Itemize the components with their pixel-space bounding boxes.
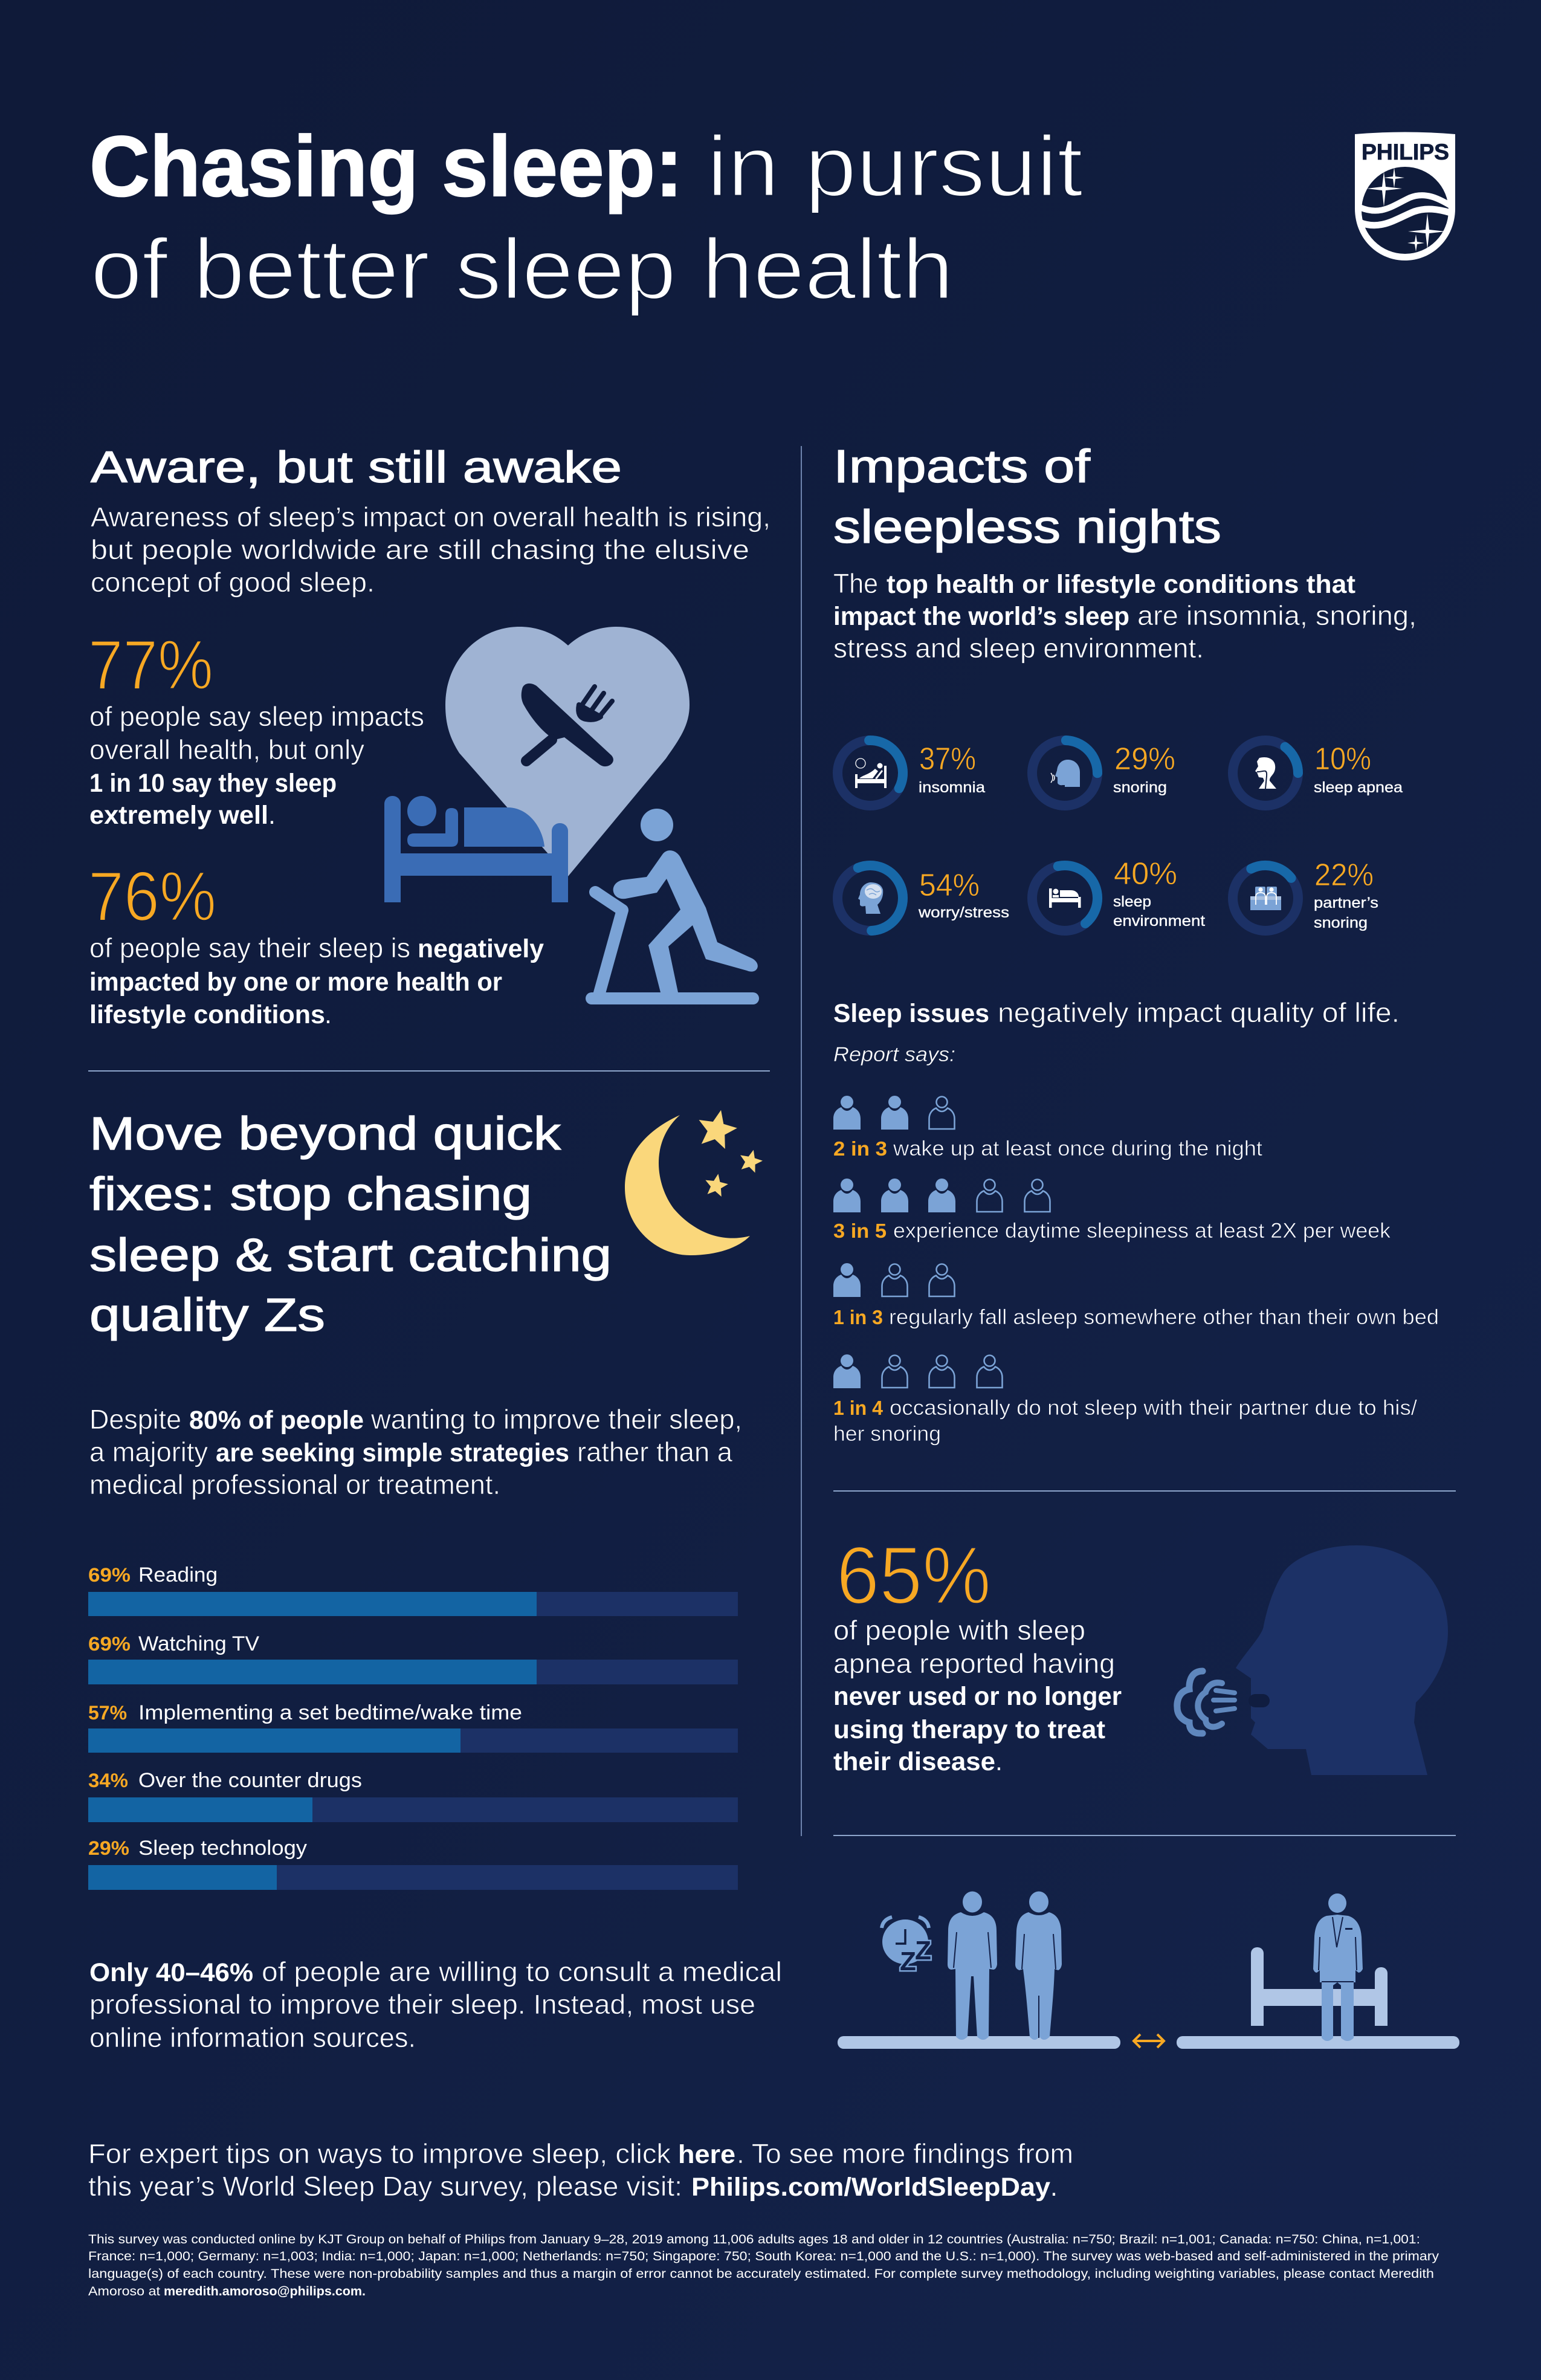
text block: despite 80% of people: Despite (89, 1404, 181, 1435)
bar: watching TV 69%: 69% (88, 1633, 131, 1655)
text block: awareness intro: but people worldwide are still chasing the elusive (91, 534, 749, 565)
donut: sleep apnea 10%: sleep apnea (1314, 779, 1403, 796)
text block: sleep apnea therapy: . (995, 1747, 1003, 1776)
text block: 76% description: negatively (418, 934, 544, 963)
illustration: heart, bed and treadmill (384, 627, 759, 1004)
text block: 77% description (89, 701, 424, 830)
text block: call to action (88, 2138, 1073, 2202)
text block: despite 80% of people: medical professional or treatment. (89, 1469, 500, 1500)
text block: sleep issues: negatively impact quality of life. (998, 997, 1400, 1028)
donut: worry/stress 54% (828, 856, 1009, 940)
text block: sleep apnea therapy: of people with sleep (833, 1615, 1085, 1646)
text block: sleep apnea therapy: using therapy to treat (833, 1715, 1105, 1744)
text block: survey methodology footnote: Amoroso at (88, 2285, 160, 2298)
icon: alarm clock with Zs: Z (915, 1936, 931, 1965)
pictogram: 1 in 4 sleep apart: occasionally do not sleep with their partner due to his/ (890, 1396, 1417, 1420)
donut: sleep apnea 10%: 10% (1314, 742, 1371, 777)
heading: Move beyond quick fixes: quality Zs (89, 1289, 325, 1341)
icon: heart with knife and fork (445, 627, 690, 876)
heading: Move beyond quick fixes (89, 1108, 612, 1341)
text block: survey methodology footnote: This survey was conducted online by KJT Group on behalf of Philips from January 9–28, 2019 among 11,006 adults ages 18 and older in 12 countries (Australia: n=750; Brazil: n=1,001; Canada: n=750: China, n=1,001: (88, 2233, 1420, 2246)
floor: doctor (1177, 2036, 1459, 2049)
text block: call to action: this year’s World Sleep Day survey, please visit: (88, 2171, 682, 2202)
icon: alarm clock with Zs (882, 1917, 931, 1976)
icon: crescent moon and stars (625, 1106, 764, 1255)
text block: survey methodology footnote: meredith.amoroso@philips.com. (164, 2285, 366, 2298)
icon: Philips shield logo (1355, 132, 1455, 260)
text block: sleep issues (833, 997, 1400, 1066)
icon: head silhouette breathing out (1177, 1545, 1448, 1775)
title: in pursuit (707, 118, 1083, 215)
donut: partner's snoring 22% (1222, 855, 1378, 942)
bar: set bedtime 57% (88, 1701, 738, 1753)
icon: airway head (1255, 757, 1276, 789)
icon: two people in bed (1250, 887, 1281, 910)
pictogram: 1 in 4 sleep apart (833, 1354, 1417, 1446)
text block: 76% description (89, 933, 544, 1029)
pictogram: 1 in 4 sleep apart: 1 in 4 (833, 1397, 884, 1419)
bar: set bedtime 57%: 57% (88, 1702, 127, 1724)
stat: 76%: 76% (88, 857, 216, 936)
text block: 77% description: . (268, 801, 276, 830)
text block: despite 80% of people: are seeking simple strategies (216, 1438, 569, 1467)
bar: reading 69% (88, 1563, 738, 1616)
bar: watching TV 69% (88, 1632, 738, 1684)
text block: 77% description: overall health, but only (89, 734, 364, 765)
text block: despite 80% of people: a majority (89, 1437, 208, 1467)
bar: over the counter drugs 34% (88, 1769, 738, 1822)
text block: call to action: . (1050, 2173, 1058, 2202)
donut: sleep environment 40%: sleep (1113, 893, 1151, 910)
icon: snoring head (1051, 760, 1080, 787)
bar: sleep technology 29% (88, 1837, 738, 1890)
panel divider: vertical rule (801, 446, 802, 1836)
text block: sleep apnea therapy: their disease (833, 1747, 995, 1776)
pictogram: 3 in 5 daytime sleepiness (833, 1179, 1391, 1243)
pictogram: 1 in 3 fall asleep elsewhere: 1 in 3 (833, 1306, 883, 1328)
text block: survey methodology footnote: France: n=1,000; Germany: n=1,003; India: n=1,000; Japan: n=1,000; Netherlands: n=750; Singapore: 750; South Korea: n=1,000 and the U.S.: n=1,000). The survey was web-based and self-administered in the primary (88, 2249, 1439, 2263)
text block: despite 80% of people: rather than a (577, 1437, 733, 1467)
floor: patients (838, 2036, 1120, 2049)
pictogram: 1 in 3 fall asleep elsewhere (833, 1263, 1439, 1329)
donut: sleep apnea 10% (1220, 727, 1403, 819)
bar: sleep technology 29%: Sleep technology (138, 1837, 307, 1860)
donut: worry/stress 54%: worry/stress (918, 904, 1009, 921)
heading: Aware, but still awake: Aware, but still awake (91, 443, 622, 492)
text block: 77% description: of people say sleep impacts (89, 701, 424, 732)
icon: bed (1049, 888, 1081, 908)
donut: partner's snoring 22%: 22% (1314, 858, 1374, 893)
donut: snoring 29%: snoring (1113, 779, 1167, 796)
text block: despite 80% of people: 80% of people (189, 1406, 364, 1435)
text block: only 40-46%: online information sources. (89, 2022, 416, 2053)
heading: Move beyond quick fixes: Move beyond quick (89, 1108, 561, 1160)
text block: sleep issues: Report says: (833, 1043, 955, 1066)
text block: survey methodology footnote (88, 2233, 1439, 2298)
icon: person in bed (384, 796, 568, 902)
text block: despite 80% of people: wanting to improve their sleep, (370, 1404, 742, 1435)
icon: alarm clock with Zs: Z (900, 1947, 916, 1976)
text block: 77% description: 1 in 10 say they sleep (89, 769, 337, 798)
pictogram: 2 in 3 wake up: wake up at least once during the night (893, 1137, 1262, 1160)
divider above sleep apnea stat (833, 1490, 1456, 1492)
pictogram: 1 in 4 sleep apart: her snoring (833, 1422, 941, 1446)
title: Chasing sleep: (89, 118, 683, 215)
text block: only 40-46%: professional to improve their sleep. Instead, most use (89, 1989, 755, 2020)
text block: top health conditions: impact the world’s sleep (833, 602, 1129, 631)
stat: 65%: 65% (836, 1530, 991, 1621)
pictogram: 2 in 3 wake up (833, 1096, 1262, 1160)
heading: Impacts of sleepless nights: sleepless nights (833, 501, 1221, 553)
text block: top health conditions: The (833, 568, 878, 599)
icon: bed behind doctor (1251, 1947, 1388, 2026)
donut: partner's snoring 22%: partner’s (1314, 894, 1378, 911)
text block: sleep issues: Sleep issues (833, 999, 989, 1028)
text block: call to action: . To see more findings from (737, 2138, 1073, 2169)
heading: Impacts of sleepless nights: Impacts of (833, 441, 1091, 493)
text block: despite 80% of people (89, 1404, 742, 1500)
text block: call to action: For expert tips on ways to improve sleep, click (88, 2138, 671, 2169)
bar: over the counter drugs 34%: Over the counter drugs (138, 1769, 362, 1792)
text block: survey methodology footnote: language(s) of each country. These were non-probability samples and thus a margin of error cannot be accurately estimated. For complete survey methodology, including weighting variables, please contact Meredith (88, 2267, 1434, 2281)
donut: sleep environment 40% (1026, 856, 1205, 937)
text block: only 40-46%: Only 40–46% (89, 1958, 253, 1987)
text block: 76% description: lifestyle conditions (89, 1000, 325, 1029)
text block: awareness intro: concept of good sleep. (91, 567, 375, 598)
icon: Philips shield logo: PHILIPS (1362, 140, 1449, 164)
text block: top health conditions: stress and sleep environment. (833, 633, 1204, 664)
donut: insomnia 37% (836, 739, 985, 807)
donut: worry/stress 54%: 54% (919, 868, 980, 903)
bar: over the counter drugs 34%: 34% (88, 1770, 128, 1791)
title: of better sleep health (91, 221, 954, 317)
icon: person on treadmill (586, 809, 759, 1004)
heading: Impacts of sleepless nights (833, 441, 1221, 553)
text block: top health conditions: are insomnia, snoring, (1137, 600, 1417, 631)
stat: 77%: 77% (88, 626, 213, 704)
icon: head with brain (858, 882, 883, 914)
bar chart: simple sleep strategies (88, 1563, 738, 1890)
pictogram: 3 in 5 daytime sleepiness: 3 in 5 (833, 1220, 887, 1242)
text block: 77% description: extremely well (89, 801, 268, 830)
bar: reading 69%: 69% (88, 1564, 131, 1586)
icon: insomnia bed (855, 758, 887, 788)
pictogram: 3 in 5 daytime sleepiness: experience daytime sleepiness at least 2X per week (893, 1219, 1391, 1243)
donut: sleep environment 40%: environment (1113, 913, 1205, 930)
divider under awareness section (88, 1070, 770, 1072)
text block: 76% description: impacted by one or more health or (89, 968, 502, 997)
text block: 76% description: of people say their sleep is (89, 933, 410, 963)
arrow: two-way (1134, 2034, 1164, 2048)
text block: call to action: here (678, 2140, 735, 2169)
figure: woman (1015, 1892, 1062, 2040)
donut: insomnia 37%: 37% (919, 742, 976, 777)
text block: only 40-46%: of people are willing to consult a medical (262, 1956, 782, 1987)
heading: Move beyond quick fixes: fixes: stop chasing (89, 1168, 532, 1220)
illustration: people, doctor and floors (838, 1892, 1459, 2049)
text block: sleep apnea therapy (833, 1615, 1122, 1776)
text block: awareness intro: Awareness of sleep’s impact on overall health is rising, (91, 502, 771, 532)
text block: top health conditions: top health or lifestyle conditions that (887, 570, 1355, 599)
donut: snoring 29% (1031, 739, 1175, 807)
text block: sleep apnea therapy: apnea reported having (833, 1648, 1115, 1679)
text block: only 40-46% (89, 1956, 782, 2053)
bar: watching TV 69%: Watching TV (138, 1632, 259, 1655)
title (89, 118, 1083, 317)
pictogram: 2 in 3 wake up: 2 in 3 (833, 1137, 887, 1160)
text block: awareness intro (91, 502, 771, 598)
text block: 76% description: . (325, 1000, 332, 1029)
donut: sleep environment 40%: 40% (1114, 856, 1177, 891)
bar: reading 69%: Reading (138, 1563, 218, 1586)
text block: top health conditions (833, 568, 1417, 664)
bar: sleep technology 29%: 29% (88, 1837, 129, 1859)
donut: snoring 29%: 29% (1114, 742, 1175, 777)
text block: sleep apnea therapy: never used or no longer (833, 1682, 1122, 1711)
donut: insomnia 37%: insomnia (919, 779, 985, 796)
heading: Move beyond quick fixes: sleep & start catching (89, 1229, 612, 1281)
pictogram: 1 in 3 fall asleep elsewhere: regularly fall asleep somewhere other than their own bed (889, 1305, 1439, 1329)
text block: call to action: Philips.com/WorldSleepDay (691, 2173, 1050, 2202)
bar: set bedtime 57%: Implementing a set bedtime/wake time (138, 1701, 522, 1724)
figure: man (948, 1892, 997, 2040)
donut: partner's snoring 22%: snoring (1314, 914, 1368, 931)
figure: doctor (1313, 1893, 1363, 2041)
divider above consult illustration (833, 1835, 1456, 1836)
